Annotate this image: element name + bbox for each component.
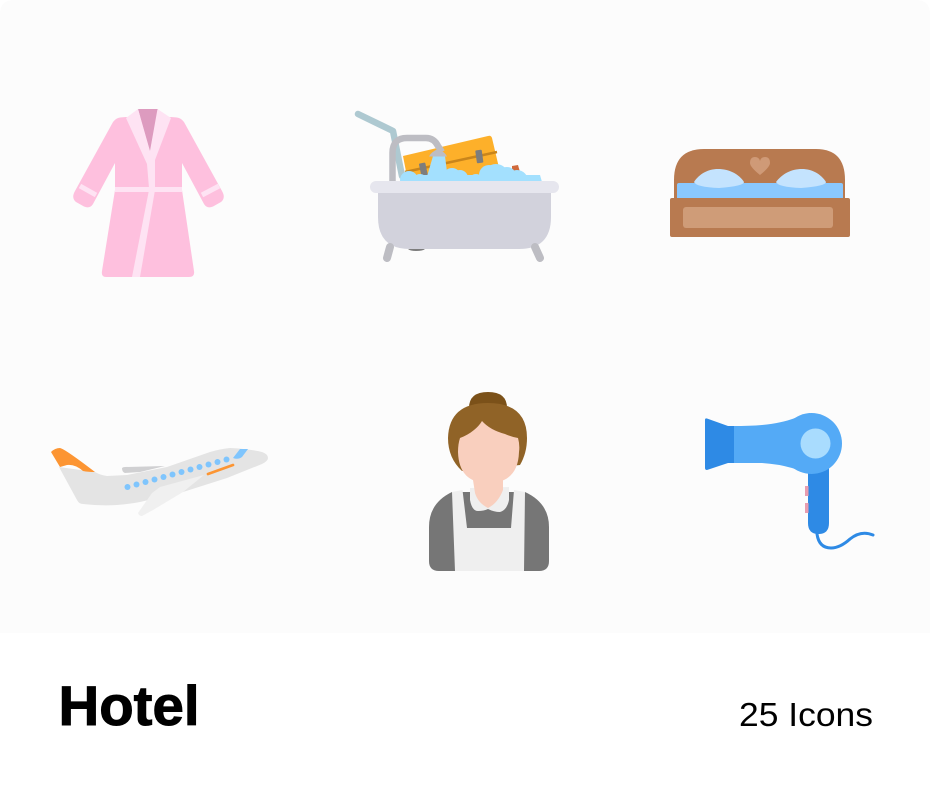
handle bbox=[808, 468, 829, 534]
icon: housekeeper bbox=[429, 392, 549, 571]
hair bbox=[448, 403, 527, 471]
face bbox=[458, 421, 519, 483]
icon count: 25 Icons bbox=[739, 697, 873, 734]
dress bbox=[429, 492, 549, 571]
hair bun bbox=[469, 392, 507, 408]
icon: hair dryer bbox=[705, 413, 873, 548]
faucet bbox=[392, 138, 442, 182]
body bbox=[733, 413, 842, 474]
icon: bathrobe bbox=[73, 109, 224, 277]
shower head bbox=[429, 149, 447, 156]
buttons bbox=[805, 486, 808, 496]
apron bbox=[452, 490, 525, 571]
nozzle bbox=[705, 418, 734, 470]
water stream bbox=[426, 156, 448, 180]
title: Hotel bbox=[58, 674, 200, 737]
neck bbox=[473, 480, 503, 508]
shower hose bbox=[358, 114, 402, 176]
icon: double bed bbox=[670, 149, 850, 237]
suitcase bbox=[403, 136, 500, 192]
icon: bathtub with suitcase bbox=[358, 114, 559, 258]
feet bbox=[408, 249, 425, 251]
tub body bbox=[378, 193, 551, 249]
vent circle bbox=[800, 428, 830, 458]
cord bbox=[817, 533, 873, 548]
icon: airplane bbox=[51, 448, 268, 516]
collar bbox=[470, 487, 509, 512]
tub rim bbox=[370, 181, 559, 193]
foam bubbles bbox=[399, 164, 542, 192]
